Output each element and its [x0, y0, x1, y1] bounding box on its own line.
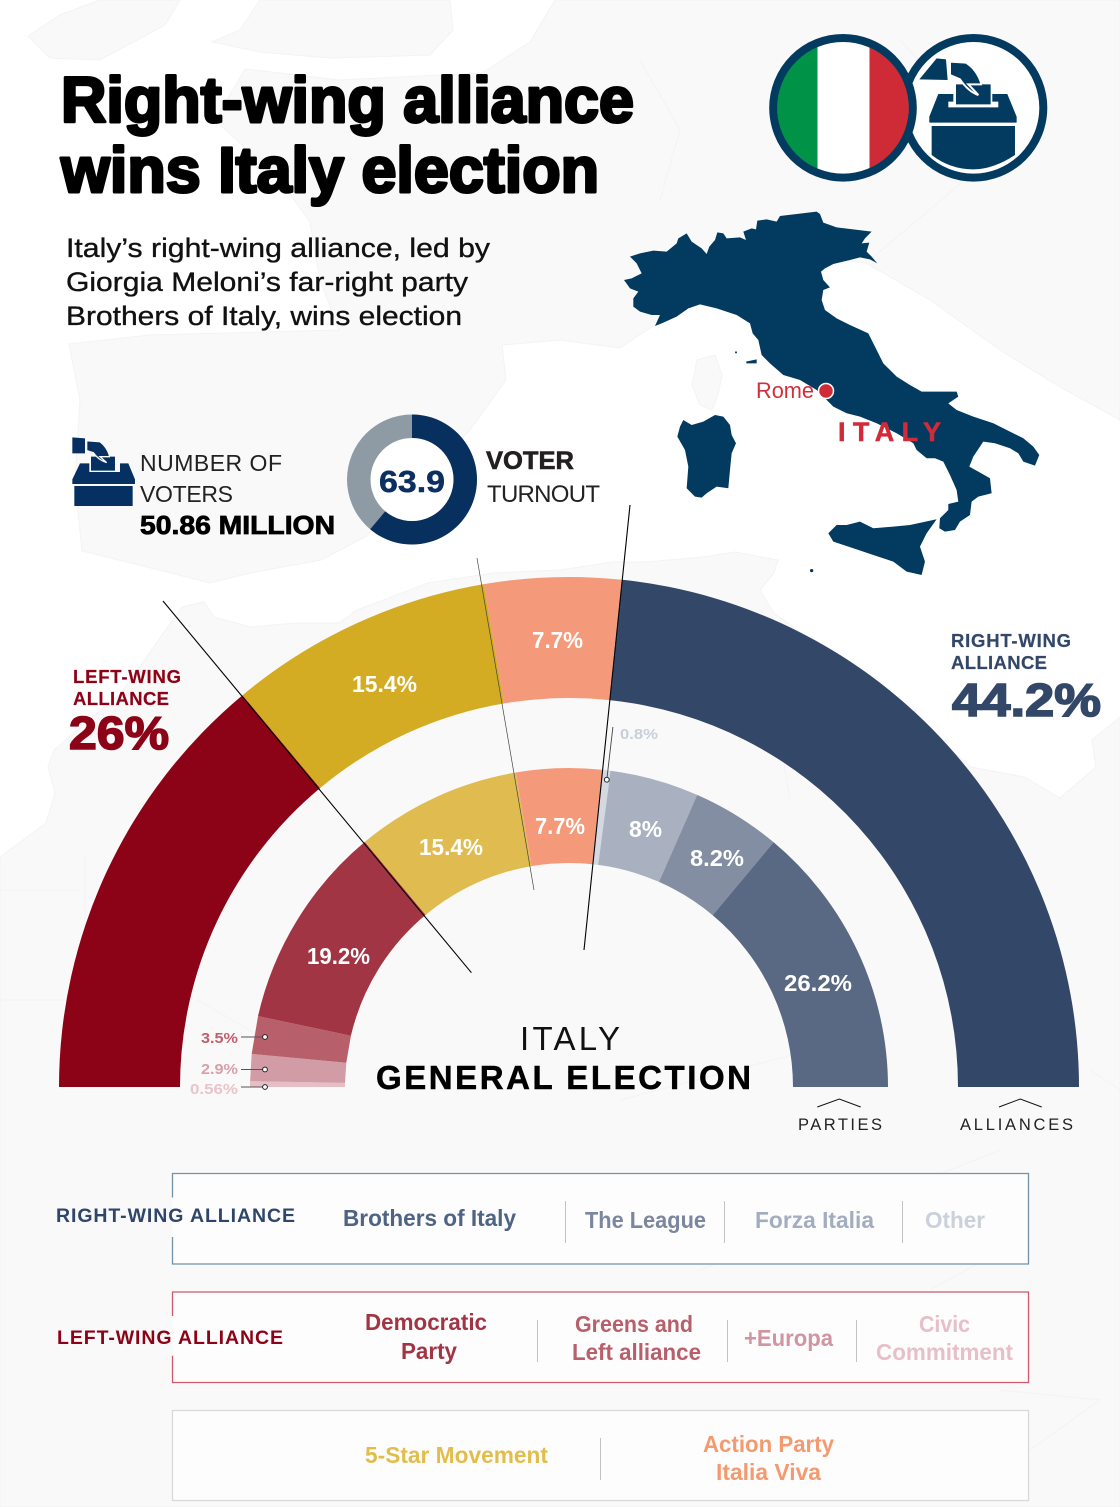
- chart: alliances outer semicircle: 7.7%: [532, 627, 583, 653]
- panel: left-wing alliance legend: Commitment: [876, 1339, 1013, 1365]
- chart: parties inner semicircle: 26.2%: [784, 970, 852, 996]
- label: right-wing alliance total: RIGHT-WING: [951, 630, 1071, 651]
- panel: right-wing alliance legend: Other: [925, 1207, 985, 1233]
- panel: left-wing alliance legend: Civic: [919, 1311, 970, 1337]
- small party callouts left: 3.5%: [201, 1030, 238, 1047]
- panel: other parties legend: Italia Viva: [716, 1459, 821, 1485]
- chart: voter turnout donut: 63.9: [379, 464, 445, 499]
- label: left-wing alliance total: 26%: [69, 707, 169, 759]
- small party callouts left: [190, 1030, 267, 1098]
- label: right-wing alliance total: 44.2%: [952, 674, 1101, 726]
- panel: right-wing alliance legend: Forza Italia: [755, 1207, 874, 1233]
- title: Right-wing alliance: [61, 64, 634, 136]
- label: right-wing alliance total: [951, 630, 1101, 726]
- axis label: parties: [798, 1099, 882, 1134]
- chart: parties inner semicircle: [250, 768, 888, 1087]
- label: left-wing alliance total: ALLIANCE: [73, 688, 169, 709]
- chart: voter turnout donut: [347, 414, 477, 544]
- panel: right-wing alliance legend: [56, 1174, 1028, 1264]
- panel: left-wing alliance legend: +Europa: [744, 1325, 833, 1351]
- label: ITALY on map: ITALY: [838, 417, 941, 447]
- map of Italy: [624, 212, 1039, 575]
- title: [60, 64, 634, 206]
- subtitle: Brothers of Italy, wins election: [66, 301, 462, 331]
- panel: right-wing alliance legend: RIGHT-WING ALLIANCE: [56, 1205, 295, 1227]
- stat: number of voters: [140, 450, 335, 540]
- chart: alliances outer semicircle: 15.4%: [352, 671, 417, 697]
- small party callout 0.8%: [604, 726, 658, 782]
- icon: ballot box badge: [904, 38, 1043, 178]
- chart centre title: [376, 1020, 751, 1096]
- title: wins Italy election: [60, 134, 599, 206]
- chart: parties inner semicircle: 7.7%: [535, 813, 585, 839]
- chart centre title: GENERAL ELECTION: [376, 1059, 751, 1096]
- panel: other parties legend: [172, 1410, 1028, 1500]
- divider lines between blocs: [163, 505, 630, 973]
- small party callouts left: 2.9%: [201, 1061, 238, 1078]
- axis label: alliances: ALLIANCES: [960, 1116, 1073, 1134]
- panel: right-wing alliance legend: The League: [585, 1207, 706, 1233]
- chart centre title: ITALY: [520, 1020, 620, 1057]
- chart: parties inner semicircle: 19.2%: [307, 943, 370, 969]
- axis label: alliances: [960, 1099, 1073, 1134]
- panel: left-wing alliance legend: Democratic: [365, 1309, 487, 1335]
- chart: parties inner semicircle: 8.2%: [690, 845, 744, 871]
- panel: left-wing alliance legend: LEFT-WING ALLIANCE: [57, 1327, 283, 1349]
- stat: voter turnout label: TURNOUT: [487, 481, 600, 508]
- label: Rome: Rome: [756, 378, 814, 403]
- small party callout 0.8%: 0.8%: [620, 726, 658, 743]
- panel: left-wing alliance legend: [57, 1292, 1028, 1382]
- label: right-wing alliance total: ALLIANCE: [951, 652, 1047, 673]
- stat: number of voters: NUMBER OF: [140, 450, 282, 476]
- subtitle: [66, 233, 491, 331]
- chart: alliances outer semicircle: [59, 577, 1079, 1087]
- label: left-wing alliance total: [69, 666, 181, 759]
- subtitle: Italy’s right-wing alliance, led by: [66, 233, 491, 263]
- panel: other parties legend: 5-Star Movement: [365, 1442, 548, 1468]
- chart: parties inner semicircle: 15.4%: [419, 834, 483, 860]
- panel: other parties legend: Action Party: [703, 1431, 834, 1457]
- panel: left-wing alliance legend: Party: [401, 1338, 457, 1364]
- stat: voter turnout label: [486, 447, 600, 508]
- subtitle: Giorgia Meloni’s far-right party: [66, 267, 469, 297]
- stat: number of voters: 50.86 MILLION: [140, 510, 335, 540]
- axis label: parties: PARTIES: [798, 1116, 882, 1134]
- panel: right-wing alliance legend: Brothers of Italy: [343, 1205, 516, 1231]
- stat: voter turnout label: VOTER: [486, 447, 574, 475]
- icon: ballot box small: [72, 437, 135, 506]
- chart: parties inner semicircle: 8%: [629, 816, 662, 842]
- panel: left-wing alliance legend: Greens and: [575, 1311, 693, 1337]
- stat: number of voters: VOTERS: [140, 481, 233, 507]
- label: left-wing alliance total: LEFT-WING: [73, 666, 181, 687]
- panel: left-wing alliance legend: Left alliance: [572, 1339, 701, 1365]
- icon: Italian flag badge: [770, 30, 920, 190]
- small party callouts left: 0.56%: [190, 1081, 238, 1098]
